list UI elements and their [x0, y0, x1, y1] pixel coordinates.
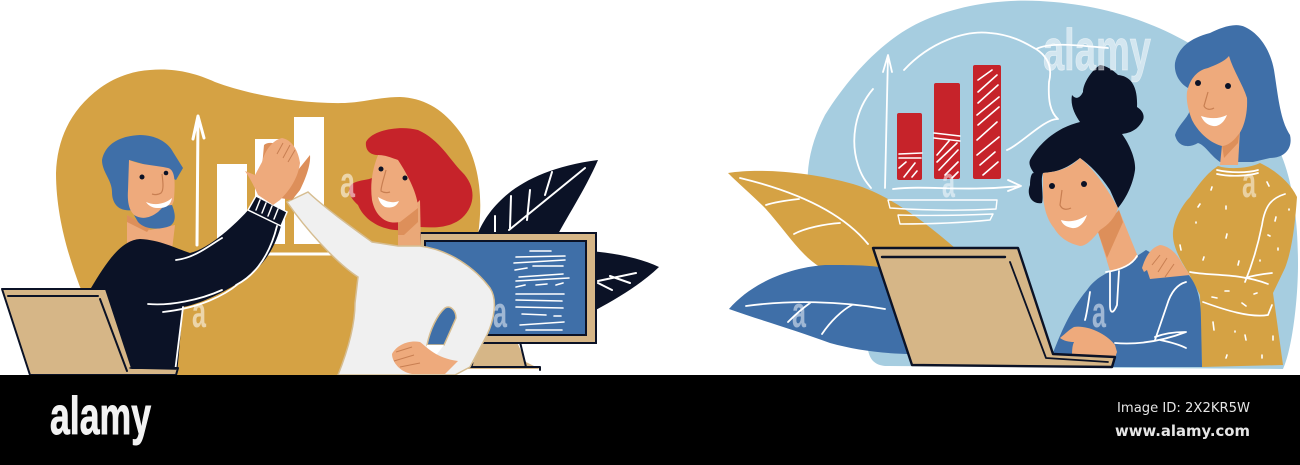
back hand — [262, 143, 310, 200]
watermark: a — [942, 158, 955, 207]
watermark: a — [493, 288, 507, 337]
face — [128, 160, 175, 218]
standing woman hand on shoulder — [1142, 245, 1190, 279]
footer bar — [0, 375, 1300, 465]
footer logo: alamy — [50, 387, 151, 446]
cuff — [248, 196, 287, 226]
neck — [1220, 130, 1240, 165]
watermark — [192, 18, 1256, 337]
watermark: a — [192, 288, 206, 337]
blue leaf — [729, 265, 912, 354]
website: www.alamy.com — [1115, 422, 1250, 440]
front hand — [245, 138, 300, 205]
arm gap — [427, 307, 456, 345]
face — [371, 155, 418, 223]
hand on keyboard — [1060, 327, 1117, 366]
blue hair — [102, 135, 183, 210]
hair and bun — [1029, 65, 1144, 208]
watermark: a — [340, 158, 355, 207]
neck — [1098, 210, 1138, 271]
watermark: a — [1242, 158, 1256, 207]
woman hand on hip — [392, 342, 458, 374]
watermark: a — [1092, 288, 1106, 337]
left laptop — [2, 289, 178, 375]
neck — [398, 200, 421, 246]
red hair — [349, 128, 472, 230]
background bar chart sketch — [193, 116, 330, 254]
sweater — [1053, 250, 1202, 367]
beard — [134, 205, 175, 229]
sleeve outline — [148, 226, 277, 372]
man with beard — [91, 135, 310, 375]
dress dots — [1180, 182, 1289, 358]
watermark: a — [792, 288, 806, 337]
blue hair — [1175, 25, 1291, 162]
right laptop — [873, 248, 1115, 367]
red bar chart — [883, 55, 1021, 224]
standing woman — [1173, 25, 1297, 367]
seated woman — [1029, 65, 1202, 367]
thought bubble outline — [854, 33, 1108, 188]
gold leaf — [728, 171, 955, 270]
sweater lines — [1085, 256, 1186, 348]
face — [1187, 56, 1247, 146]
watermark: alamy — [1043, 18, 1151, 83]
navy sweater — [91, 207, 282, 375]
right background blob — [808, 1, 1298, 369]
back plants: dark leaves — [478, 160, 659, 313]
mustard dress — [1173, 163, 1297, 367]
screen text lines — [514, 251, 569, 330]
face — [1043, 158, 1118, 246]
neck — [127, 215, 175, 250]
white sweater with raised arm — [287, 192, 494, 375]
image id: Image ID: 2X2KR5W — [1117, 400, 1250, 416]
monitor — [420, 233, 596, 370]
woman with red hair, high five — [287, 128, 494, 375]
left background blob — [56, 70, 480, 375]
